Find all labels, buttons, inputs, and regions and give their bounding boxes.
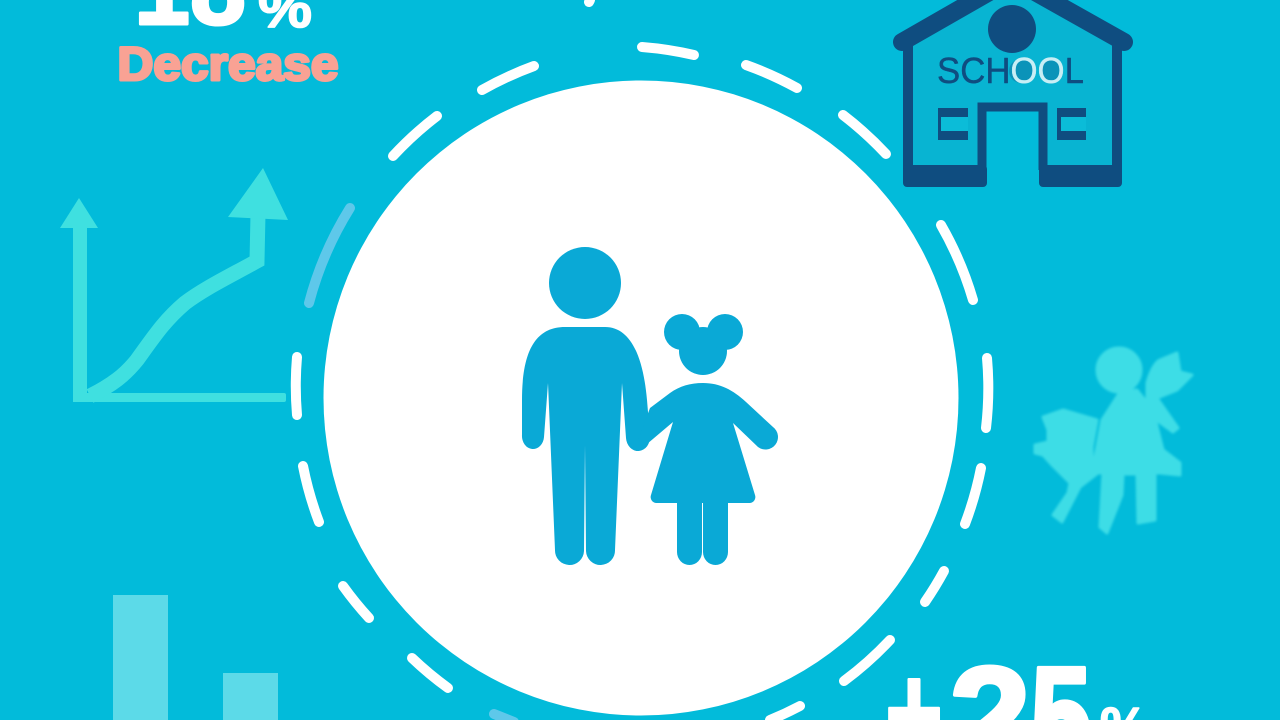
- icon: growth chart arrows: [60, 168, 288, 402]
- dashed ring around circle: [296, 0, 988, 720]
- icon: adult and child holding hands: [522, 247, 778, 565]
- adult figure: [522, 247, 650, 565]
- icon: school building: SCHOOL: [937, 50, 1084, 91]
- ring accent dashes: [309, 208, 514, 720]
- stat: 18% decrease: Decrease: [118, 37, 338, 90]
- stat: 18% decrease: [118, 0, 338, 90]
- stat: +25%: [885, 634, 1148, 720]
- icon: school building: [902, 0, 1124, 187]
- bar chart: [113, 595, 278, 720]
- child figure: [638, 314, 778, 565]
- white center circle: [324, 80, 958, 716]
- icon: faded child with toy: [1035, 348, 1192, 533]
